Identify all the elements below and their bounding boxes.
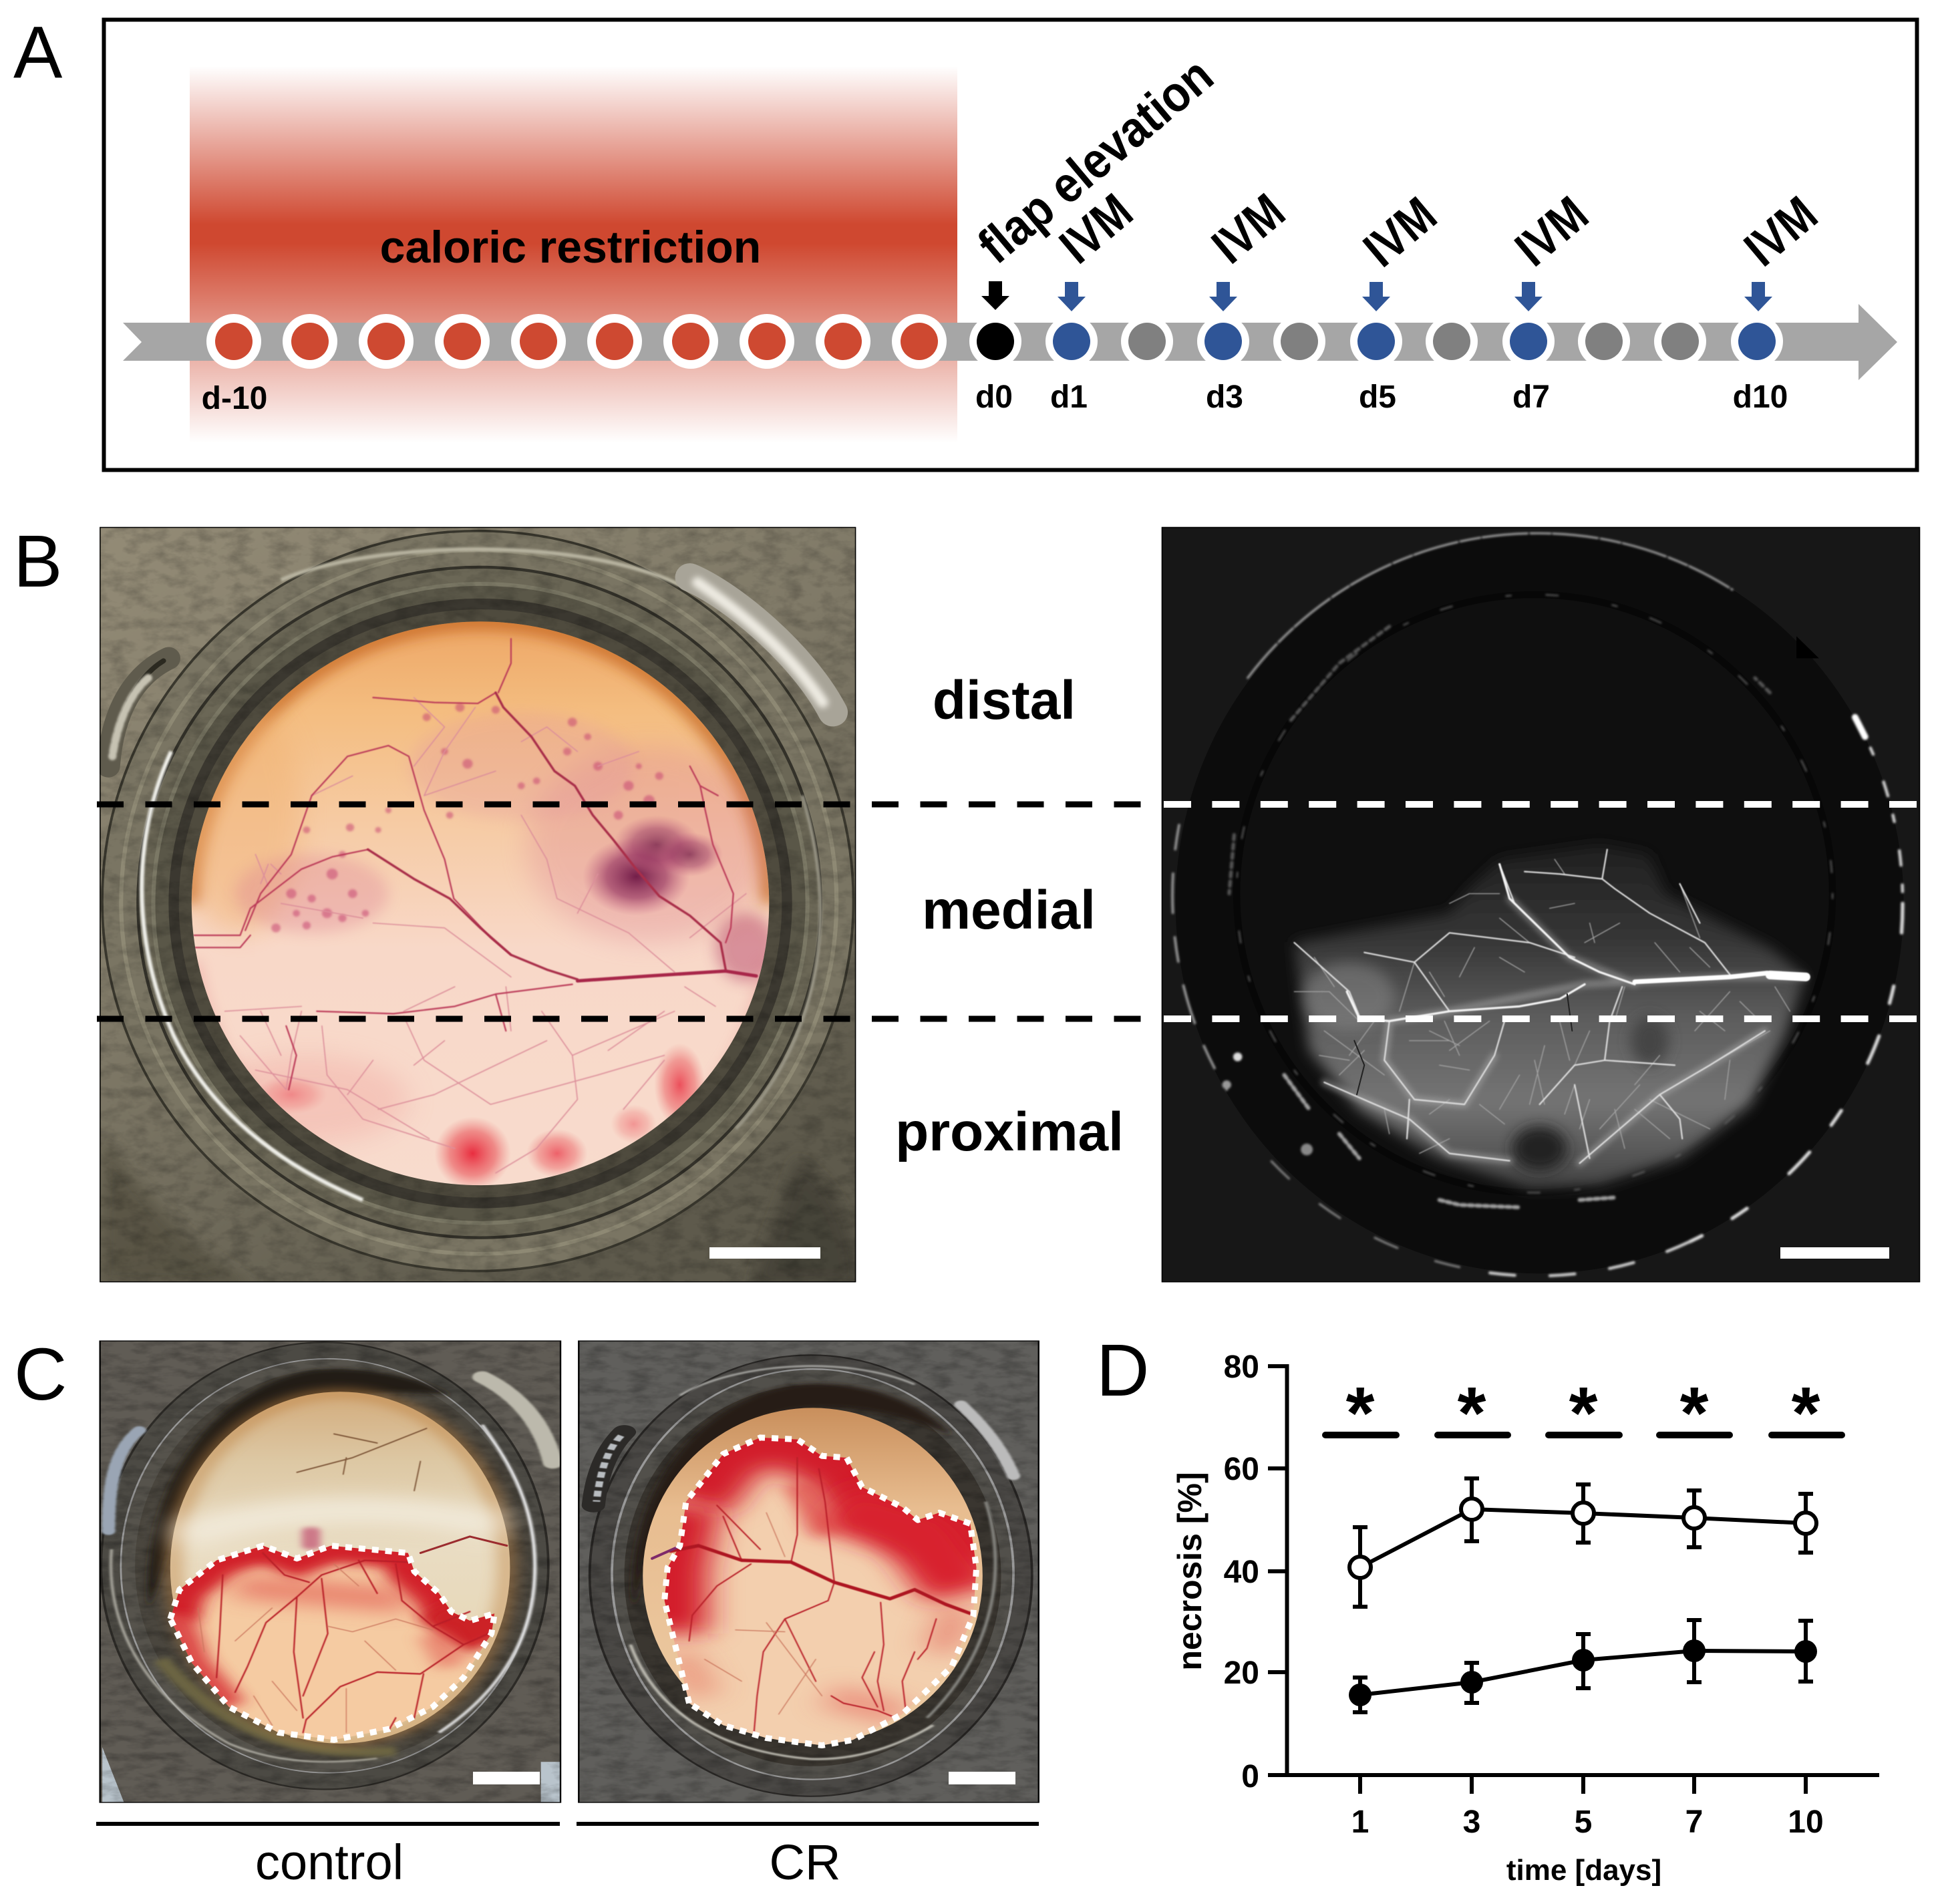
series: control, open circles: [1349, 1478, 1816, 1607]
day labels: d-10: [202, 381, 267, 416]
rotated labels: IVM: IVM: [1734, 185, 1828, 277]
y tick labels: 20: [1224, 1655, 1259, 1691]
x tick labels: 1: [1351, 1804, 1369, 1840]
rotated labels: IVM: IVM: [1353, 186, 1447, 277]
x axis: [1268, 1775, 1879, 1794]
x tick labels: [1351, 1804, 1824, 1840]
timeline arrow: [123, 304, 1897, 380]
panel B: fluorescence chamber image: [1162, 527, 1920, 1282]
panel C: control chamber photo: [99, 1340, 561, 1803]
x tick labels: 7: [1685, 1804, 1703, 1840]
panel A: experimental timeline: [13, 11, 1917, 470]
pre-operative day nodes: [206, 314, 947, 369]
significance asterisks: *: [1680, 1372, 1709, 1454]
significance asterisks: [1346, 1372, 1820, 1454]
zone label: medial: medial: [922, 880, 1096, 941]
caloric restriction heading: caloric restriction: [380, 222, 761, 273]
significance asterisks: *: [1346, 1372, 1375, 1454]
panel label C: C: [14, 1333, 67, 1416]
panel label B: B: [13, 520, 62, 603]
significance asterisks: *: [1569, 1372, 1598, 1454]
y tick labels: 0: [1241, 1759, 1259, 1794]
significance asterisks: *: [1458, 1372, 1486, 1454]
group label: control: control: [255, 1835, 404, 1890]
day labels: d3: [1206, 379, 1243, 415]
panel label D: D: [1096, 1329, 1149, 1412]
scale bar: [949, 1772, 1015, 1784]
y axis: [1268, 1366, 1287, 1775]
day labels: d10: [1733, 379, 1788, 415]
x tick labels: 3: [1463, 1804, 1480, 1840]
y axis title: necrosis [%]: [1171, 1472, 1208, 1671]
day labels: d5: [1359, 379, 1396, 415]
rotated labels: IVM: IVM: [1049, 182, 1143, 274]
panel B: brightfield chamber photo: [100, 527, 858, 1286]
dashed zone boundaries (white): [1164, 804, 1920, 1019]
panel A frame: [104, 20, 1917, 470]
x tick labels: 5: [1575, 1804, 1592, 1840]
significance bars: [1325, 1432, 1842, 1438]
caloric restriction gradient band: [190, 66, 957, 443]
group label: CR: CR: [770, 1835, 840, 1890]
IVM and rest day nodes: [1045, 315, 1783, 367]
scale bar: [473, 1772, 540, 1784]
rotated label: flap elevation: flap elevation: [968, 47, 1224, 275]
zone label: distal: distal: [933, 670, 1076, 731]
y tick labels: 60: [1224, 1452, 1259, 1487]
y tick labels: 40: [1224, 1555, 1259, 1590]
arrow: flap elevation: [981, 281, 1009, 310]
rotated labels: IVM: IVM: [1504, 185, 1599, 277]
scale bar: [709, 1247, 820, 1259]
panel C: CR chamber photo: [578, 1340, 1039, 1803]
panel D: necrosis line chart: [1171, 1350, 1879, 1887]
day labels: d7: [1512, 379, 1550, 415]
rotated labels: IVM: [1049, 182, 1828, 277]
flap elevation day node: [969, 315, 1021, 367]
dashed zone boundaries (black): [97, 804, 1162, 1019]
rotated labels: IVM: IVM: [1201, 182, 1295, 274]
x tick labels: 10: [1788, 1804, 1824, 1840]
x axis title: time [days]: [1506, 1854, 1661, 1887]
panel label A: A: [13, 11, 63, 94]
day labels: d1: [1050, 379, 1088, 415]
significance asterisks: *: [1792, 1372, 1820, 1454]
y tick labels: [1224, 1350, 1259, 1794]
group underline: CR: [577, 1822, 1039, 1826]
series: CR, filled circles: [1349, 1620, 1817, 1712]
day labels: [202, 379, 1788, 416]
arrows: IVM time points: [1058, 282, 1772, 311]
day labels: d0: [975, 379, 1013, 415]
scale bar: [1780, 1247, 1889, 1259]
zone label: proximal: proximal: [895, 1102, 1124, 1162]
group underline: control: [96, 1822, 560, 1826]
y tick labels: 80: [1224, 1350, 1259, 1385]
